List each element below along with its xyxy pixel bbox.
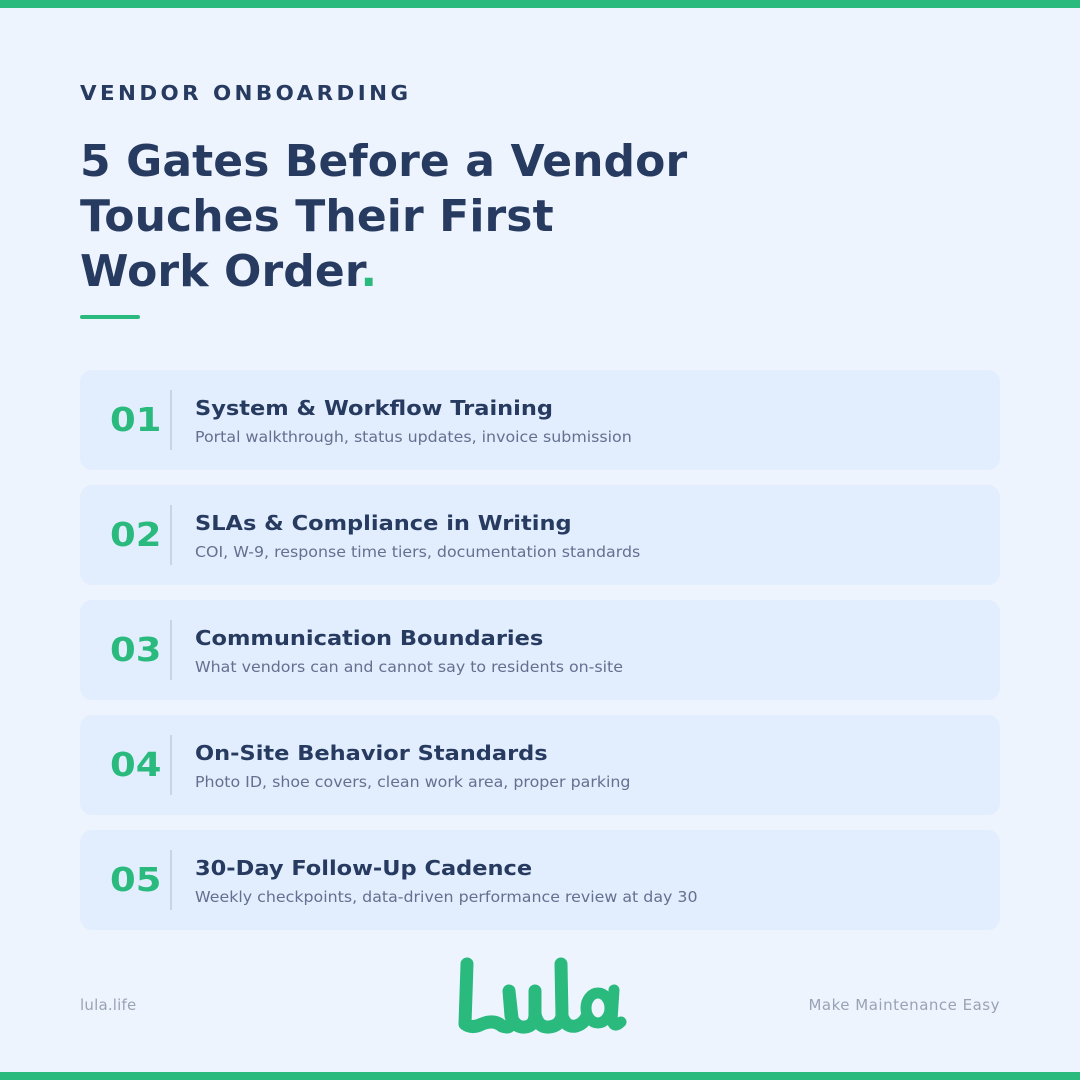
title (80, 136, 688, 297)
card 2: COI, W-9, response time tiers, documentation standards (195, 543, 640, 561)
card 4: 04 (110, 745, 161, 784)
logo: Lula (458, 958, 626, 1034)
bottom bar (0, 1072, 1080, 1080)
eyebrow label: VENDOR ONBOARDING (80, 81, 411, 105)
card 3: What vendors can and cannot say to residents on-site (195, 658, 623, 676)
card 5: 05 (110, 860, 161, 899)
card 1 (80, 370, 1000, 470)
card 4 (80, 715, 1000, 815)
card 4: On-Site Behavior Standards (195, 741, 548, 765)
card 1: 01 (110, 400, 161, 439)
card 1: Portal walkthrough, status updates, invoice submission (195, 428, 632, 446)
card 5: Weekly checkpoints, data-driven performance review at day 30 (195, 888, 698, 906)
card 1: System & Workflow Training (195, 396, 553, 420)
footer url: lula.life (80, 996, 136, 1014)
card 3: Communication Boundaries (195, 626, 543, 650)
title: Work Order. (80, 246, 377, 297)
top bar (0, 0, 1080, 8)
card 3 (80, 600, 1000, 700)
card 2: SLAs & Compliance in Writing (195, 511, 572, 535)
title underline accent (80, 315, 140, 319)
card 4: Photo ID, shoe covers, clean work area, proper parking (195, 773, 630, 791)
footer tagline: Make Maintenance Easy (808, 996, 1000, 1014)
card 5: 30-Day Follow-Up Cadence (195, 856, 532, 880)
card 2 (80, 485, 1000, 585)
title: 5 Gates Before a Vendor (80, 136, 687, 187)
card 2: 02 (110, 515, 161, 554)
title: Touches Their First (80, 191, 554, 242)
card 5 (80, 830, 1000, 930)
card 3: 03 (110, 630, 161, 669)
